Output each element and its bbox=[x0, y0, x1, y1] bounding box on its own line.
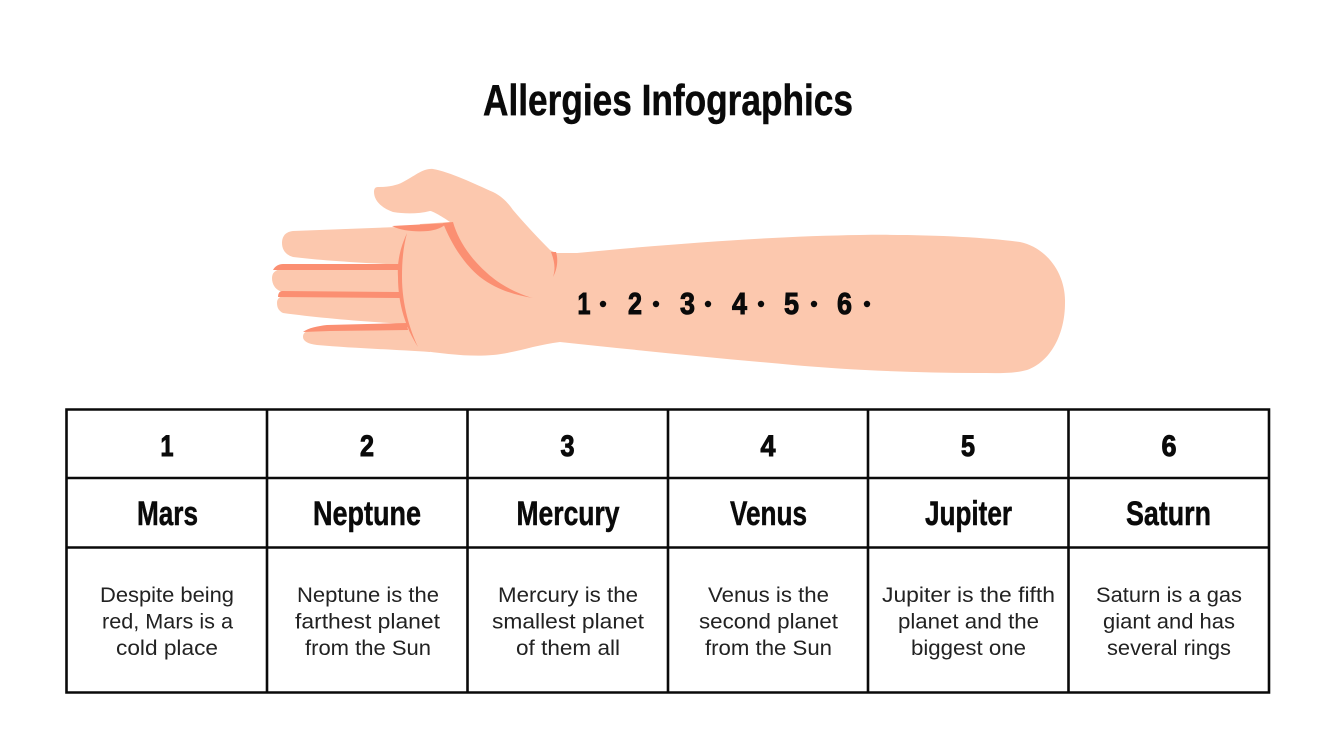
mark 6 bbox=[837, 286, 870, 321]
column 5: Jupiter: biggest one bbox=[911, 636, 1026, 660]
column 4: Venus: Venus bbox=[730, 495, 807, 533]
column 1: Mars: 1 bbox=[160, 430, 174, 463]
mark 2: 2 bbox=[628, 286, 642, 321]
column 1: Mars: Despite being bbox=[100, 583, 234, 607]
column 5: Jupiter: planet and the bbox=[898, 610, 1039, 634]
column 3: Mercury: 3 bbox=[560, 430, 574, 463]
finger and palm creases bbox=[273, 222, 557, 347]
mark 2 bbox=[628, 286, 659, 321]
mark 4: 4 bbox=[732, 286, 748, 321]
column 4: Venus: second planet bbox=[699, 610, 838, 634]
column 2: Neptune: from the Sun bbox=[305, 636, 431, 660]
column 5: Jupiter: Jupiter is the fifth bbox=[882, 583, 1055, 607]
column 6: Saturn: Saturn bbox=[1126, 495, 1211, 533]
column 2: Neptune: 2 bbox=[360, 430, 374, 463]
column 1: Mars: Mars bbox=[137, 495, 198, 533]
column 6: Saturn bbox=[1096, 430, 1242, 660]
mark 4 bbox=[732, 286, 764, 321]
column 6: Saturn: several rings bbox=[1107, 636, 1231, 660]
column 2: Neptune: farthest planet bbox=[295, 610, 440, 634]
column 3: Mercury: of them all bbox=[516, 636, 620, 660]
column 3: Mercury bbox=[492, 430, 644, 660]
mark 1: 1 bbox=[578, 286, 590, 321]
column 6: Saturn: giant and has bbox=[1103, 610, 1235, 634]
column 1: Mars: red, Mars is a bbox=[102, 610, 233, 634]
column 5: Jupiter: Jupiter bbox=[925, 495, 1012, 533]
column 6: Saturn: 6 bbox=[1162, 430, 1176, 463]
mark 6: 6 bbox=[837, 286, 852, 321]
illustration: arm and hand bbox=[272, 169, 1065, 373]
column 5: Jupiter bbox=[882, 430, 1055, 660]
column 4: Venus: from the Sun bbox=[705, 636, 832, 660]
mark 3: 3 bbox=[680, 286, 695, 321]
column 3: Mercury: smallest planet bbox=[492, 610, 644, 634]
mark 3 bbox=[680, 286, 711, 321]
column 2: Neptune: Neptune bbox=[313, 495, 421, 533]
table bbox=[66, 410, 1269, 692]
fingers bbox=[272, 226, 430, 352]
column 2: Neptune bbox=[295, 430, 440, 660]
column 5: Jupiter: 5 bbox=[961, 430, 975, 463]
arm and palm bbox=[374, 169, 1065, 373]
column 4: Venus bbox=[699, 430, 838, 660]
column 3: Mercury: Mercury is the bbox=[498, 583, 638, 607]
column 4: Venus: Venus is the bbox=[708, 583, 829, 607]
column 2: Neptune: Neptune is the bbox=[297, 583, 439, 607]
title: Allergies Infographics bbox=[483, 76, 853, 125]
mark 5 bbox=[784, 286, 817, 321]
column 1: Mars bbox=[100, 430, 234, 660]
column 6: Saturn: Saturn is a gas bbox=[1096, 583, 1242, 607]
column 4: Venus: 4 bbox=[760, 430, 776, 463]
mark 1 bbox=[578, 286, 606, 321]
mark 5: 5 bbox=[784, 286, 799, 321]
skin test marks bbox=[578, 286, 870, 321]
column 1: Mars: cold place bbox=[116, 636, 218, 660]
column 3: Mercury: Mercury bbox=[516, 495, 620, 533]
